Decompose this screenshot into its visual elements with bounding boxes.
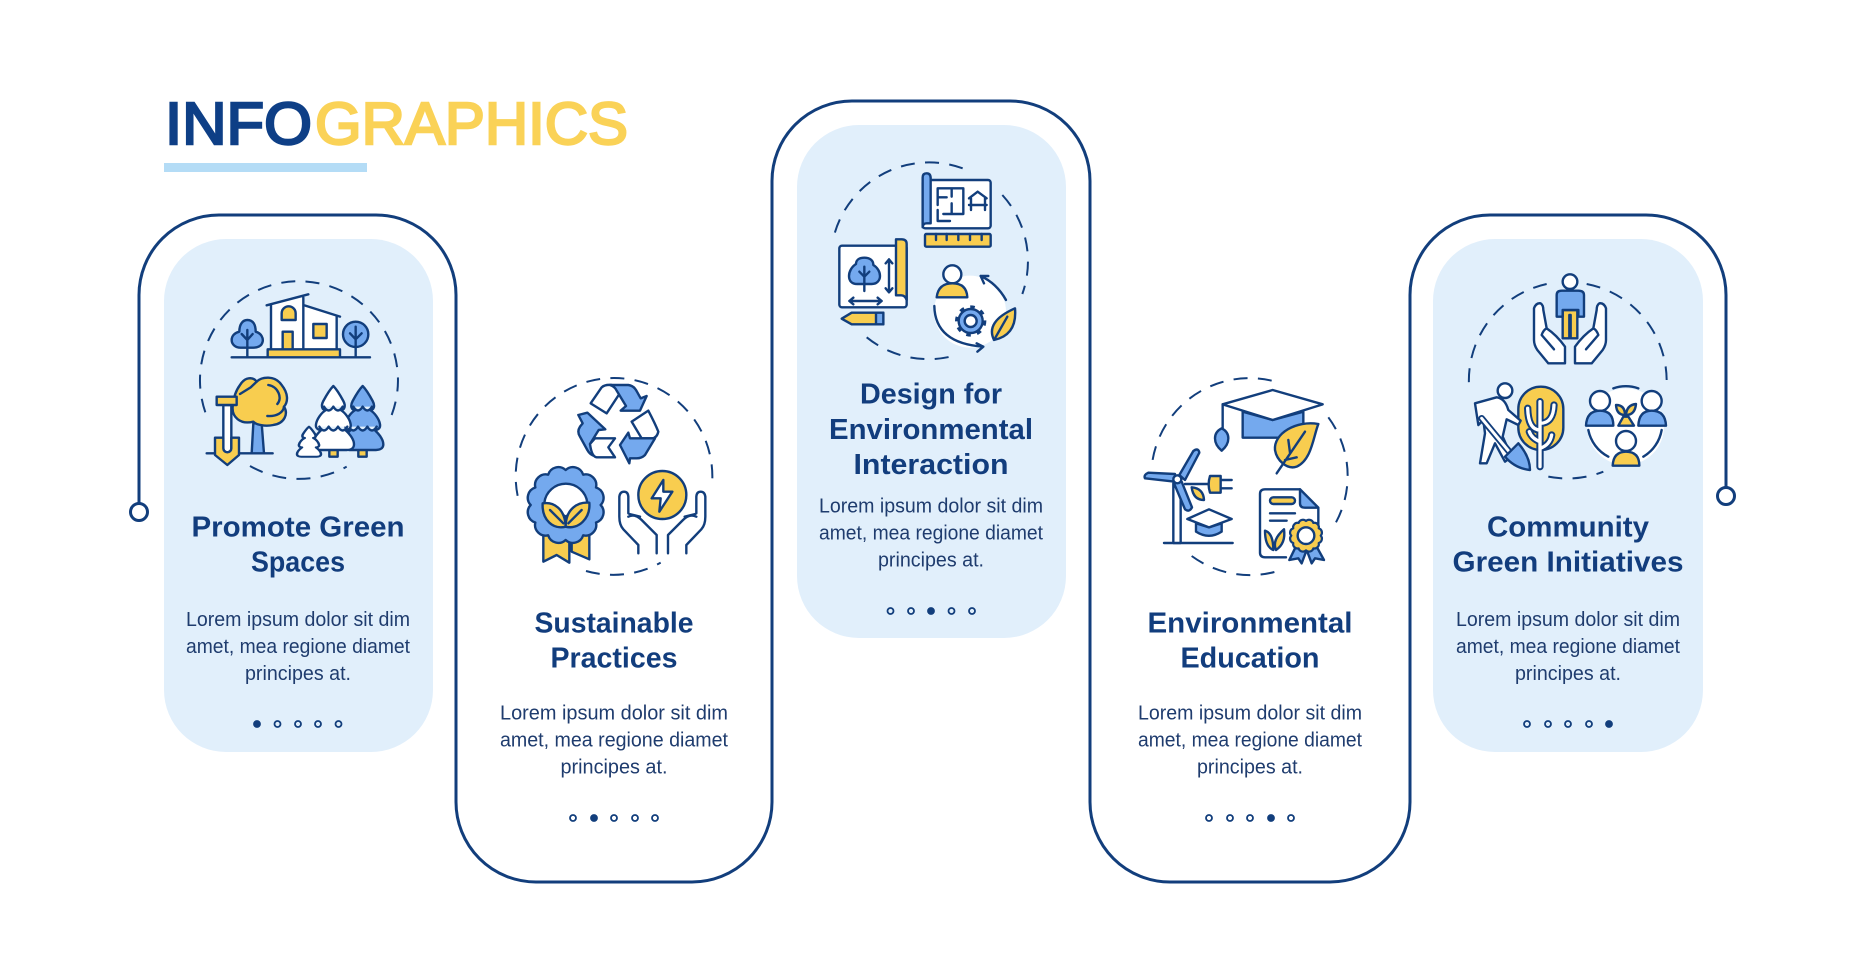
pager dots [888,608,975,614]
heading: Design for [860,378,1002,410]
panel: sustainable practices [500,378,728,821]
icon: cupped hands, gardener and community [1469,274,1667,478]
icon: blueprints, person and gear [834,162,1028,359]
title: INFO [165,91,312,157]
body text: principes at. [1197,756,1303,778]
heading: Promote Green [192,512,404,544]
body text [186,609,410,685]
heading: Green Initiatives [1452,546,1684,578]
heading: Education [1180,642,1320,674]
body text: Lorem ipsum dolor sit dim [500,702,728,724]
body text: principes at. [560,756,668,778]
title underline [164,163,367,172]
heading: Interaction [854,449,1008,481]
panel: design for environmental interaction [819,162,1043,614]
body text: Lorem ipsum dolor sit dim [186,609,410,631]
heading [192,512,404,578]
panel background: community green initiatives [1433,239,1703,752]
title: GRAPHICS [315,91,628,157]
title [165,91,628,157]
body text: principes at. [878,550,984,572]
heading [1148,608,1352,674]
heading: Community [1487,512,1649,544]
connector outline [130,101,1734,882]
body text: principes at. [1515,663,1621,685]
pager dots [570,815,658,821]
pager dots [1206,815,1294,821]
panel: community green initiatives [1452,274,1684,727]
body text: Lorem ipsum dolor sit dim [1456,609,1680,631]
body text: principes at. [245,663,351,685]
panel: environmental education [1138,378,1362,821]
panel background: design for environmental interaction [797,125,1066,638]
panel background: promote green spaces [164,239,433,752]
heading: Environmental [829,414,1033,446]
body text [500,702,728,778]
heading: Practices [550,642,678,674]
body text [1456,609,1680,685]
body text: amet, mea regione diamet [186,636,410,658]
pager dots [254,721,342,727]
heading: Environmental [1148,608,1352,640]
heading: Spaces [251,546,345,578]
icon: recycling, badge and energy hands [516,378,712,575]
body text: Lorem ipsum dolor sit dim [819,496,1043,518]
heading: Sustainable [534,608,694,640]
body text [1138,702,1362,778]
body text [819,496,1043,572]
heading [829,378,1033,481]
icon: graduation cap, wind turbine and certificate [1145,378,1348,575]
pager dots [1524,721,1612,727]
body text: amet, mea regione diamet [500,730,728,752]
body text: amet, mea regione diamet [819,522,1043,544]
body text: amet, mea regione diamet [1456,636,1680,658]
heading [1452,512,1684,578]
heading [534,608,694,674]
body text: Lorem ipsum dolor sit dim [1138,702,1362,724]
panel: promote green spaces [186,281,410,727]
body text: amet, mea regione diamet [1138,730,1362,752]
icon: house, trees and shovel [200,281,398,479]
